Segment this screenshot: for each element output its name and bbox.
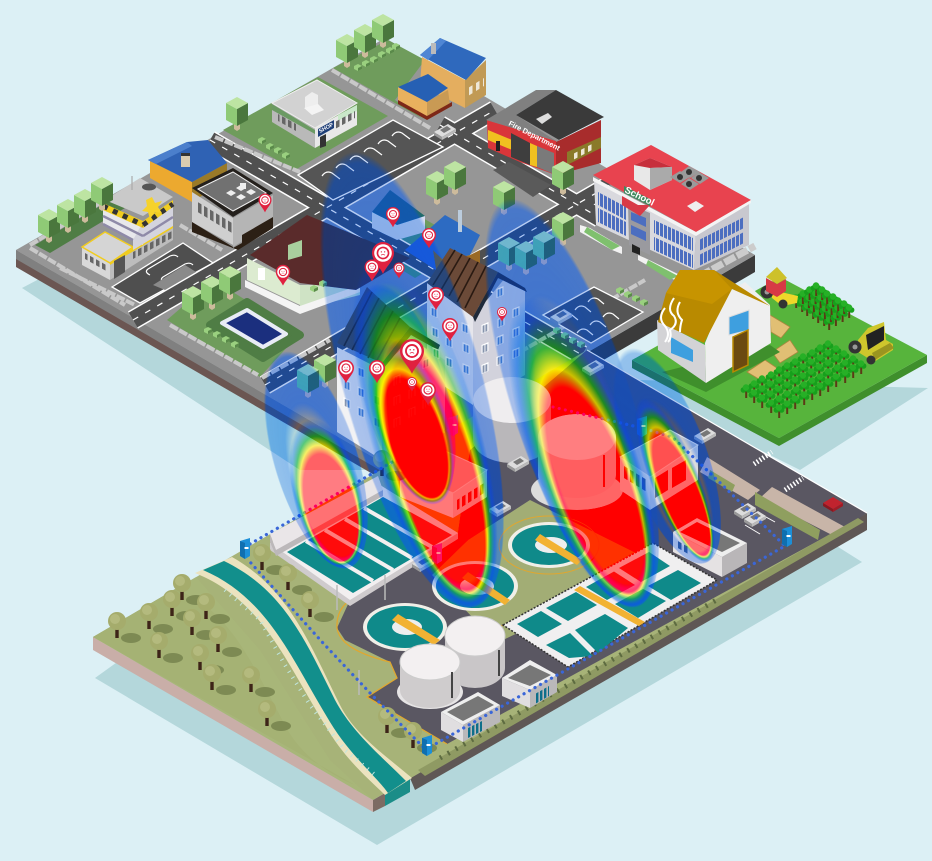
plant trees and vehicles xyxy=(108,360,843,753)
building: back-right facility xyxy=(673,518,747,577)
shop sign text: SHOP xyxy=(318,122,335,135)
building: school xyxy=(580,145,755,282)
dotted site boundary xyxy=(250,407,785,747)
panel: city platform xyxy=(16,38,755,484)
small houses in the middle block xyxy=(372,190,480,282)
parking lots xyxy=(112,120,643,343)
building: farmhouse xyxy=(657,270,780,392)
building: blue houses xyxy=(398,38,486,120)
panel: treatment plant platform xyxy=(93,350,867,812)
green lots xyxy=(35,40,579,377)
building: police station xyxy=(82,176,173,280)
orchards xyxy=(791,294,834,330)
panel: apartment buildings xyxy=(337,248,527,470)
pallets xyxy=(747,315,798,381)
building: office xyxy=(620,430,698,510)
building: fire department xyxy=(486,90,604,175)
fences xyxy=(30,70,645,378)
utility buildings xyxy=(441,660,557,742)
building: black and white building xyxy=(192,168,273,250)
icon: yellow tractor xyxy=(848,322,894,364)
apartment windows xyxy=(344,286,520,428)
roadside strip xyxy=(700,457,760,500)
city trees xyxy=(38,14,648,398)
fire department label: Fire Department xyxy=(507,119,562,153)
clarifiers xyxy=(363,516,599,651)
ground shadows xyxy=(22,268,928,845)
icon: red tractor xyxy=(760,267,798,308)
panel: farm xyxy=(632,277,927,446)
sedimentation tank with bridge xyxy=(503,543,717,667)
aeration tank xyxy=(270,476,458,606)
complaint pins xyxy=(258,194,507,405)
building: shop xyxy=(272,80,357,148)
river xyxy=(195,557,412,795)
building: orange house xyxy=(148,140,227,202)
building: central control house xyxy=(400,450,487,518)
heat map plumes xyxy=(243,134,744,626)
boundary signs xyxy=(240,415,792,756)
tank: big white tank and red tank xyxy=(473,377,623,510)
storage tanks xyxy=(397,616,505,709)
swimming pool xyxy=(210,302,300,358)
school sign text: School xyxy=(623,185,656,209)
roads xyxy=(133,110,610,385)
building: white house with maroon roof xyxy=(245,215,410,314)
